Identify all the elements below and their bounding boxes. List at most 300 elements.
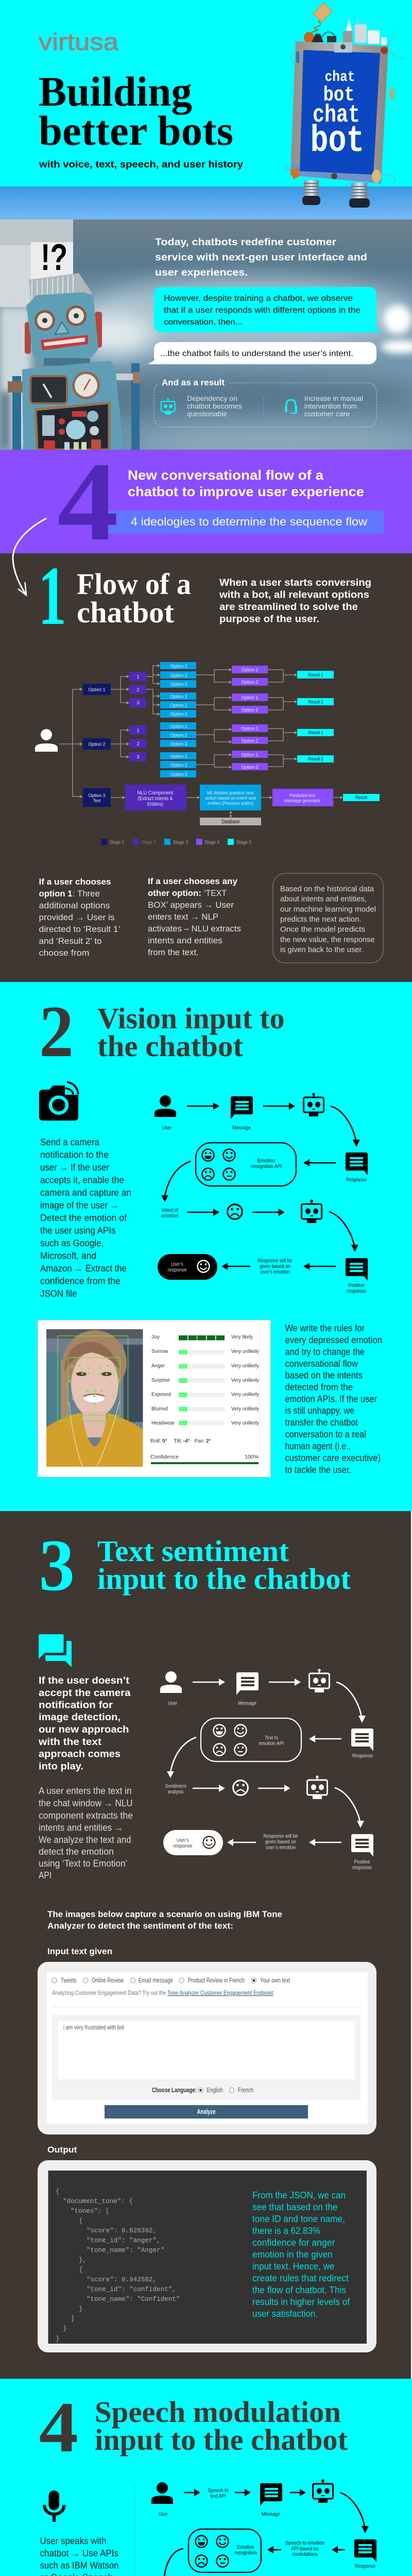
intro text: purpose of the user. [219, 614, 319, 624]
text: no camera approach [38, 1675, 131, 1772]
text: json interpretation: emotion in the given [252, 2249, 333, 2260]
robot neck [44, 358, 90, 366]
flowchart labels: NLU Component [137, 790, 174, 796]
analyze button: Analyze [197, 2108, 216, 2115]
robot ears [25, 312, 102, 354]
flowchart labels: ML Models predicts next [207, 790, 254, 796]
flowchart labels: 1 [136, 728, 140, 734]
phone frame [290, 41, 388, 183]
flowchart labels: Option 2 [170, 673, 187, 679]
label: message: Message [232, 1125, 251, 1131]
screen text: chat [313, 101, 360, 129]
language selector: English [207, 2087, 223, 2094]
flowchart labels: Option 1 [170, 694, 187, 700]
heading: chatbot [77, 596, 175, 629]
input area: i am very frustrated with bot [63, 2024, 125, 2031]
text: rules for depressed emotion: conversational flow [285, 1359, 358, 1369]
legend [101, 839, 251, 845]
text: camera steps: user → If the user [40, 1162, 109, 1173]
text: ibm tone analyzer intro [47, 1909, 282, 1931]
text: option 1 explanation: choose from [39, 948, 90, 958]
arrow: bot to positive response [329, 1212, 358, 1252]
flowchart labels: Option 2 [170, 733, 187, 738]
text: ibm tone analyzer intro: The images below capture a scenario on using IBM Tone [47, 1909, 282, 1919]
arrow: response to emotion api [303, 1159, 336, 1166]
flowchart labels: Option 2 [241, 765, 259, 770]
database box [200, 818, 261, 825]
robot meter gauge [30, 376, 67, 403]
heading: output: Output [47, 2145, 77, 2155]
icon: microphone [44, 2490, 64, 2522]
number 3: 3 [39, 1524, 75, 1606]
callout: machine learning note: Based on the historical data [280, 885, 374, 893]
robot nose [55, 322, 69, 334]
screen text: bot [310, 120, 365, 162]
callout: machine learning note [273, 873, 383, 963]
number 2: 2 [39, 991, 74, 1072]
text: no camera approach: into play. [39, 1761, 83, 1772]
text: speech steps: chatbot → Use APIs [40, 2548, 118, 2558]
text: json interpretation: confidence for anger [252, 2238, 335, 2248]
flowchart labels: Option 2 [241, 680, 259, 685]
text: speech steps [40, 2536, 118, 2576]
text: json interpretation: From the JSON, we can [252, 2190, 346, 2200]
icon: user [151, 2482, 173, 2504]
label: response based on emotion: user’s emotion [260, 1269, 290, 1275]
icon: positive response [351, 1834, 373, 1857]
text: camera steps: Amazon → Extract the [40, 1263, 127, 1274]
icon: message [236, 1672, 259, 1695]
title: better bots [39, 107, 233, 154]
result labels: Result [355, 795, 367, 801]
robot toy illustration [8, 273, 140, 450]
text: rules for depressed emotion: detected from the [285, 1382, 353, 1392]
json output: ] [71, 2315, 75, 2323]
flowchart labels: Option 2 [241, 707, 259, 713]
intro text [219, 578, 371, 624]
label: speech to emotion api: Speech to emotion [285, 2540, 324, 2546]
robot dial gauge [72, 371, 100, 399]
pose angles: Roll: [150, 1438, 161, 1444]
panel: emotion detection card [38, 1320, 271, 1477]
icon: sad face [233, 1781, 248, 1795]
heading: Vision input to [97, 1002, 284, 1035]
result labels [221, 672, 367, 825]
icon: camera with signal [39, 1082, 78, 1121]
heading [128, 467, 364, 499]
heading: Text sentiment [97, 1534, 289, 1568]
title [39, 68, 233, 154]
text: json interpretation: there is a 62.83% [252, 2226, 320, 2236]
text: camera steps: confidence from the [40, 1276, 121, 1286]
flowchart labels: Option 1 [170, 724, 187, 730]
icon: positive response [346, 1258, 368, 1281]
arrow: user to message [193, 1679, 225, 1686]
text: option 1 explanation: additional options [39, 901, 110, 910]
text: option 1 explanation: If a user chooses [39, 877, 111, 887]
robot mouth [41, 335, 88, 350]
table surface [0, 187, 412, 219]
flowchart labels: (Extract Intents & [138, 795, 173, 802]
intro text: with a bot, all relevant options [219, 589, 369, 601]
text: other option explanation: intents and entities [148, 936, 222, 945]
pose angles: Tilt: [174, 1438, 182, 1444]
text: json interpretation: the flow of chatbot. This [252, 2285, 346, 2295]
text: json interpretation: results in higher levels of [252, 2297, 350, 2307]
emotion likelihood rows: Very unlikely [231, 1405, 260, 1412]
emotion recognition box: Emotion [258, 1158, 275, 1164]
result text: dependency [187, 394, 242, 418]
emotion likelihood rows: Very unlikely [231, 1363, 260, 1369]
flowchart labels: Option 1 [241, 695, 259, 701]
text: rules for depressed emotion: every depressed emotion [285, 1335, 382, 1345]
label: positive response [347, 1282, 366, 1294]
panel: input screenshot [38, 1962, 376, 2134]
emotion likelihood rows: Sorrow [151, 1348, 168, 1354]
icon: bot [309, 1669, 330, 1692]
callout: machine learning note: our machine learning model [280, 905, 376, 913]
emotion recognition box: recognition API [251, 1163, 282, 1170]
text: rules for depressed emotion: is still unhappy, we [285, 1405, 354, 1416]
arrow: user to message [187, 1103, 219, 1110]
text: camera steps: camera and capture an [40, 1188, 131, 1198]
arrow: api to emotion box [267, 2546, 281, 2553]
text: other option explanation: activates – NLU extracts [148, 924, 241, 934]
stage 3 boxes [160, 662, 261, 810]
flowchart labels: Option 3 [170, 772, 187, 777]
text: option 1 explanation: directed to ‘Result 1’ [39, 924, 121, 934]
label: response based on emotion [258, 1258, 293, 1275]
intro text: user experiences. [155, 267, 248, 278]
pose angles: 2° [206, 1438, 211, 1444]
result labels: Result 1 [308, 730, 323, 736]
text: camera steps: Detect the emotion of [40, 1213, 127, 1223]
callout: machine learning note: is given back to the user. [280, 945, 364, 954]
stage 2 boxes [125, 672, 186, 810]
language selector: French [238, 2087, 253, 2094]
flowchart labels: action based on intent and [205, 795, 255, 801]
json output: }, [79, 2257, 87, 2264]
json output: "document_tone": { [63, 2198, 133, 2205]
text: rules for depressed emotion: and try to change the [285, 1347, 365, 1357]
arrow: message to bot [269, 1679, 301, 1686]
screen text: chat [324, 69, 355, 86]
heading: input text given: Input text given [47, 1946, 112, 1956]
number 1: 1 [38, 550, 66, 642]
text: other option explanation: enters text → NLP [148, 912, 218, 922]
text to emotion box: Text to [265, 1735, 278, 1741]
label: positive response: Positive [354, 1859, 370, 1865]
text: option 1 explanation [39, 877, 121, 958]
arrow: bot to response [340, 2493, 369, 2533]
text: rules for depressed emotion: conversation to a real [285, 1429, 366, 1439]
json output [56, 2188, 180, 2343]
user's response pill: response [168, 1267, 187, 1273]
flowchart labels: Text [93, 798, 101, 804]
label: user: User [159, 2511, 168, 2517]
label: speech to text api: Speech to [208, 2487, 229, 2494]
result labels: Result 1 [308, 672, 323, 678]
result text: manual intervention [304, 394, 363, 418]
heading: Flow of a [77, 567, 191, 601]
arrow: bot to response [331, 1106, 360, 1147]
phone screen [300, 50, 380, 175]
arrow: sad face to bot [252, 1209, 284, 1216]
robot eyes [35, 306, 87, 331]
flowchart labels: message generator [284, 798, 320, 804]
label: speech to text api [208, 2487, 229, 2499]
emotion likelihood rows: Very likely [231, 1334, 253, 1340]
label: response: Response [346, 1177, 367, 1183]
icon: response [346, 1153, 368, 1175]
pose angles: -4° [183, 1438, 190, 1444]
result labels: Result 2 [308, 700, 323, 705]
arrow: intent to sad face [187, 1209, 219, 1216]
result text: dependency: chatbot becomes [187, 402, 242, 410]
text: option 1 explanation: and ‘Result 2’ to [39, 936, 102, 946]
text: rules for depressed emotion: human agent (i.e., [285, 1441, 351, 1451]
arrow: positive response to text [309, 1839, 341, 1846]
icon: bot [304, 1093, 323, 1116]
icon: bot [161, 398, 175, 414]
text: text approach steps: A user enters the text in [39, 1786, 132, 1796]
user's response pill: User’s [171, 1261, 183, 1267]
icon: bot [313, 2479, 333, 2503]
callout: machine learning note: predicts the next action. [280, 915, 362, 924]
robot machinery panel [36, 403, 109, 450]
json output: "tone_name": "Anger" [87, 2247, 164, 2254]
label: message: Message [262, 2511, 280, 2517]
json output: "tone_id": "anger", [87, 2237, 161, 2244]
flowchart labels: Option 1 [241, 726, 259, 732]
json output: "tone_name": "Confident" [87, 2296, 180, 2303]
heading [95, 2395, 348, 2456]
user's response pill [158, 1254, 217, 1280]
text: text approach steps: the chat window → NLU [39, 1798, 133, 1808]
text: text approach steps: intents and entities → [39, 1823, 123, 1833]
customer engagement note [52, 1989, 275, 1996]
flowchart labels: 2 [136, 687, 140, 692]
text: json interpretation: tone ID and tone name, [252, 2214, 345, 2224]
emotion recognition box: Emotion [237, 2544, 254, 2550]
result text: manual intervention: customer care [304, 410, 350, 418]
callout: machine learning note: Once the model predicts [280, 925, 365, 934]
heading: the chatbot [97, 1029, 244, 1063]
icon: bot [302, 1199, 321, 1223]
user's response pill: User’s [177, 1837, 189, 1843]
arrow: text to user's response [221, 1263, 250, 1270]
ideologies pill [108, 511, 384, 534]
flowchart labels: Option 1 [170, 664, 187, 669]
customer engagement note: . [273, 1989, 275, 1996]
icon: headset [285, 400, 297, 413]
text: json interpretation: input text. Hence, we [252, 2261, 335, 2272]
callout: machine learning note: the new value, the response [280, 935, 375, 944]
text: option 1 explanation: provided → User is [39, 912, 114, 922]
text: no camera approach: accept the camera [39, 1688, 131, 1699]
stage 4 boxes [232, 666, 333, 806]
radio options: Email message [139, 1977, 173, 1984]
arrow: response to speech emotion api [332, 2546, 345, 2553]
confidence bar: 100% [245, 1454, 259, 1460]
label: response based on emotion: given based on [260, 1263, 290, 1269]
text: other option explanation: other option: [148, 888, 201, 898]
flowchart labels: Option 3 [170, 682, 187, 687]
camera module [334, 42, 352, 53]
customer engagement note: Tone Analyzer Customer Engagement Endpoint [167, 1989, 273, 1996]
text: json interpretation: create rules that redirect [252, 2273, 349, 2283]
label: sentiment analysis [165, 1783, 186, 1795]
label: positive response: Positive [348, 1282, 365, 1289]
text: no camera approach: our new approach [39, 1724, 129, 1735]
callout: white speech bubble [148, 342, 376, 364]
emotion likelihood rows: Very unlikely [231, 1391, 260, 1397]
json output: "tones": [ [71, 2208, 110, 2215]
text: camera steps: JSON file [40, 1289, 77, 1299]
flowchart labels: Option 2 [170, 762, 187, 768]
customer engagement note: Analyzing Customer Engagement Data? Try out the [52, 1989, 166, 1996]
text to emotion box [201, 1718, 301, 1761]
text: ibm tone analyzer intro: Analyzer to detect the sentiment of the text: [47, 1921, 233, 1931]
text: no camera approach: with the text [38, 1737, 102, 1748]
intro text: When a user starts conversing [219, 578, 371, 588]
radio options: Tweets [61, 1977, 76, 1984]
callout: cyan speech bubble: that if a user responds with different options in the [164, 306, 360, 315]
flowchart labels: Option 1 [241, 667, 259, 673]
text: text approach steps: using ‘Text to Emotion’ [39, 1858, 128, 1869]
text: text approach steps: component extracts the [39, 1810, 133, 1821]
icon: message [231, 1096, 253, 1119]
json output: } [56, 2335, 60, 2343]
ideologies pill: 4 ideologies to determine the sequence flow [131, 515, 367, 528]
pose angles: Pan: [195, 1438, 204, 1444]
text: option 1 explanation: : Three [73, 889, 100, 899]
callout: cyan speech bubble: conversation, then... [164, 318, 243, 327]
flowchart labels: Option 2 [170, 703, 187, 708]
diagram: speech flow [151, 2479, 376, 2576]
input area [53, 2015, 360, 2100]
flowchart labels: Option 1 [170, 754, 187, 759]
radio options: Your own text [260, 1977, 290, 1984]
robot side components [284, 32, 405, 184]
icon: user [160, 1671, 182, 1693]
json output: } [63, 2325, 67, 2332]
arrow: positive response to text [303, 1263, 336, 1270]
text: no camera approach: If the user doesn’t [39, 1675, 130, 1686]
text: json interpretation [252, 2190, 350, 2319]
icon: interrobang: !? [41, 237, 67, 278]
illustration: chatbot phone robot [284, 3, 405, 208]
json output: "score": 0.628392, [87, 2227, 157, 2234]
arrow: sad face to bot [258, 1785, 290, 1792]
arrow: from heading to section 1 [13, 518, 46, 595]
photo background [0, 219, 412, 461]
emotion likelihood rows: Exposed [151, 1391, 171, 1397]
label: message: Message [238, 1700, 256, 1706]
icon: response [351, 1728, 373, 1751]
text: text approach steps [39, 1786, 133, 1880]
flowchart labels: 1 [136, 674, 140, 680]
emotion likelihood rows: Very unlikely [231, 1420, 260, 1426]
text: camera steps: the user using APIs [40, 1225, 115, 1235]
emotion likelihood rows: Headwear [151, 1420, 175, 1426]
flowchart labels [89, 664, 320, 807]
language selector: Choose Language: [152, 2087, 197, 2094]
emotion recognition box [196, 1143, 296, 1186]
text: option 1 explanation: option 1 [39, 889, 72, 899]
arrow: message to bot [290, 2489, 306, 2496]
callout: cyan speech bubble: However, despite training a chatbot, we observe [164, 294, 353, 303]
label: response based on emotion: given based on [265, 1839, 296, 1845]
text: json interpretation: user satisfaction. [252, 2309, 318, 2319]
text: camera steps [40, 1137, 131, 1299]
arrow: api to sentiment [167, 1737, 196, 1778]
intro text [155, 237, 367, 278]
arrow: user to speech api [184, 2489, 200, 2496]
result panel [154, 378, 376, 427]
flowchart [35, 662, 380, 845]
stage 5 boxes [297, 671, 380, 801]
legend: Stage 1 [110, 839, 124, 845]
text: other option explanation: If a user chooses any [148, 876, 238, 886]
label: user: User [168, 1700, 177, 1706]
heading [77, 567, 191, 629]
big number 4: 4 [57, 439, 118, 564]
diagram: text sentiment flow [160, 1669, 373, 1871]
title: Building [39, 68, 192, 115]
result text: manual intervention: Increase in manual [304, 394, 363, 402]
intro text: Today, chatbots redefine customer [155, 237, 337, 248]
label: speech to emotion api [285, 2540, 324, 2557]
flowchart labels: Option 1 [241, 752, 259, 758]
text: no camera approach: notification for [39, 1700, 113, 1710]
legend: Stage 2 [141, 839, 157, 845]
flow connectors [59, 664, 343, 818]
emotion likelihood rows: Joy [151, 1334, 160, 1340]
text: text approach steps: detect the emotion [39, 1846, 114, 1857]
text: rules for depressed emotion: to tackle the user. [285, 1465, 351, 1475]
icon: bot [307, 1775, 328, 1799]
logo: virtusa [39, 28, 118, 55]
text: rules for depressed emotion: based on the intents [285, 1370, 363, 1381]
result text: dependency: questionable [187, 410, 227, 418]
label: response based on emotion: user’s emotion [266, 1844, 296, 1851]
panel: problem statement [0, 219, 412, 461]
label: response based on emotion [264, 1833, 298, 1851]
flowchart labels: 3 [136, 754, 140, 760]
flowchart labels: entities (Previous action) [208, 801, 253, 806]
emotion likelihood rows: Blurred [151, 1405, 168, 1412]
result text: dependency: Dependency on [187, 394, 237, 402]
heading: chatbot to improve user experience [128, 484, 364, 499]
text: no camera approach: approach comes [39, 1749, 121, 1760]
subtitle: with voice, text, speech, and user history [39, 159, 244, 170]
arrow: response to api [309, 1735, 341, 1742]
json output: "score": 0.942582, [87, 2276, 157, 2283]
heading [97, 1534, 351, 1596]
icon: sad face [228, 1205, 242, 1219]
radio options: Product Review in French [188, 1977, 245, 1984]
arrow: sentiment to sad face [193, 1785, 225, 1792]
text: camera steps: Microsoft, and [40, 1251, 96, 1261]
label: intent of emotion: Intent of [162, 1207, 178, 1213]
radio options: Online Review [92, 1977, 124, 1984]
confidence bar: Confidence [150, 1454, 179, 1460]
label: response: Response [352, 1753, 373, 1759]
label: sentiment analysis: Sentiment [165, 1783, 186, 1789]
json output: { [79, 2266, 83, 2274]
flowchart labels: Predicted text [289, 793, 315, 799]
